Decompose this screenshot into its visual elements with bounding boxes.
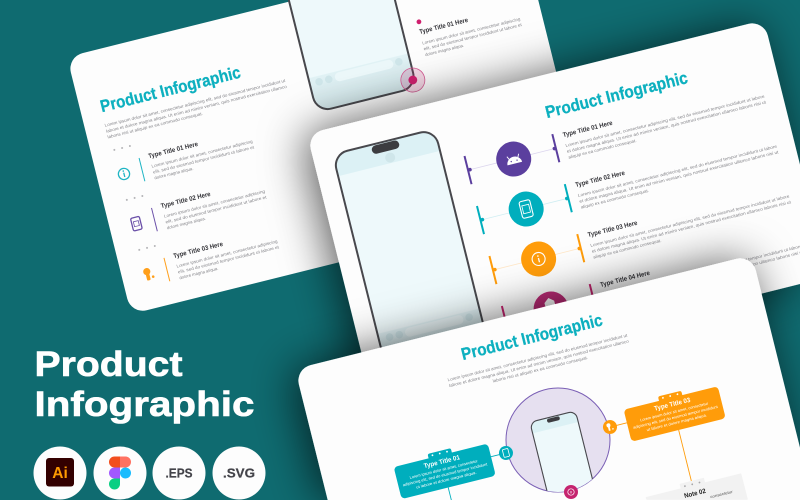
card: type title 03: Lorem ipsum dolor sit amet, consectetur xyxy=(639,400,709,422)
timeline row 4: pink: et dolore magna aliqua. Ut enim ad minim veniam, quis nostrud exercitation ullamco laboris nisi ut xyxy=(604,249,800,304)
timeline row 3: info: Type Title 03 Here xyxy=(587,220,639,239)
heading: slide two title: Product Infographic xyxy=(543,68,690,122)
callout: type title 01 with pink dot: elit, sed do eiusmod tempor incididunt ut labore et xyxy=(423,22,523,51)
heading: slide three title: Product Infographic xyxy=(459,310,605,364)
icon: svg badge xyxy=(212,446,266,500)
phone: slide one mockup xyxy=(263,0,417,112)
timeline row 3: info: Lorem ipsum dolor sit amet, consectetur adipiscing elit, sed do eiusmod tempor incididunt ut labore xyxy=(590,193,791,248)
timeline row 1: android: et dolore magna aliqua. Ut enim ad minim veniam, quis nostrud exercitation ullamco laboris nisi ut xyxy=(566,99,767,154)
timeline row 3: info xyxy=(488,179,795,288)
row: type title 01: Lorem ipsum dolor sit amet, consectetur adipiscing xyxy=(151,139,254,169)
text block: slide one intro: Lorem ipsum dolor sit amet, consectetur adipiscing elit, sed do eiusmod tempor incididunt ut xyxy=(104,78,287,128)
callout: type title 01 with pink dot: Type Title 01 Here xyxy=(419,17,469,36)
timeline row 1: android xyxy=(463,79,770,188)
callout: type title 01 with pink dot: Lorem ipsum dolor sit amet, consectetur adipiscing xyxy=(422,16,521,46)
main title: Product xyxy=(34,345,183,384)
timeline row 4: pink: Lorem ipsum dolor sit amet, consectetur adipiscing elit, sed do eiusmod tempor incididunt ut labore xyxy=(602,243,800,298)
main title xyxy=(34,345,254,424)
icon: eps badge: .EPS xyxy=(166,466,192,480)
row: type title 01: elit, sed do eiusmod tempor incididunt ut labore et xyxy=(152,144,255,175)
icon: svg badge: .SVG xyxy=(223,466,255,480)
timeline row 1: android: Type Title 01 Here xyxy=(562,120,614,139)
card: note 02: consectetur xyxy=(710,489,734,499)
text block: slide one intro: labore et dolore magna aliqua. Ut enim ad minim veniam, quis nostrud exercitation ullamco xyxy=(106,84,288,134)
card: note 02: Note 02 xyxy=(684,488,707,500)
timeline row 3: info: et dolore magna aliqua. Ut enim ad minim veniam, quis nostrud exercitation ullamco laboris nisi ut xyxy=(591,199,792,254)
row: type title 03: dolore magna aliqua. xyxy=(179,266,219,280)
connector: orange card to note xyxy=(679,430,691,481)
text block: slide three intro: laboris nisi ut aliquip ex ea commodo consequat. xyxy=(492,355,588,383)
connector: teal card to hub xyxy=(491,453,506,457)
hotspot: pink marker on phone corner xyxy=(398,65,427,95)
text block: slide three intro: labore et dolore magna aliqua. Ut enim ad minim veniam, quis nostrud exercitation ullamco xyxy=(449,338,630,388)
card: type title 01: adipiscing elit, sed do eiusmod tempor incididunt xyxy=(402,461,489,487)
timeline row 3: info: aliquip ex ea commodo consequat. xyxy=(593,238,662,260)
row: type title 03 xyxy=(138,216,282,288)
connector: teal card downward xyxy=(448,487,451,500)
row: type title 02: dolore magna aliqua. xyxy=(166,216,206,230)
row: type title 02 xyxy=(126,166,269,238)
card: type title 03 xyxy=(623,382,726,442)
phone: slide two mockup xyxy=(333,129,488,369)
heading: slide one title: Product Infographic xyxy=(98,63,243,116)
panel: middle slide with phone and timeline xyxy=(310,23,800,391)
row: type title 03: Type Title 03 Here xyxy=(173,241,224,260)
main title: Infographic xyxy=(34,385,254,424)
icon: eps badge xyxy=(152,446,206,500)
callout: type title 01 with pink dot: dolore magna aliqua. xyxy=(425,43,465,57)
connector: orange card to hub xyxy=(610,423,627,427)
card: note 02 xyxy=(646,474,747,500)
timeline row 1: android: aliquip ex ea commodo consequat. xyxy=(568,138,637,160)
icon: figma badge xyxy=(94,446,146,500)
timeline row 2: phone: Lorem ipsum dolor sit amet, consectetur adipiscing elit, sed do eiusmod tempor incididunt ut labore xyxy=(577,143,778,198)
timeline row 2: phone: Type Title 02 Here xyxy=(575,170,626,189)
icon: adobe illustrator badge: Ai xyxy=(52,465,68,482)
panel: front slide with hub diagram xyxy=(298,258,800,500)
timeline row 1: android: Lorem ipsum dolor sit amet, consectetur adipiscing elit, sed do eiusmod tempor incididunt ut labore xyxy=(565,93,766,148)
timeline row 4: pink: aliquip ex ea commodo consequat. xyxy=(605,288,674,310)
row: type title 02: Type Title 02 Here xyxy=(160,191,212,210)
timeline row 2: phone: aliquip ex ea commodo consequat. xyxy=(580,188,649,210)
card: type title 01: Type Title 01 xyxy=(423,454,461,470)
callout: type title 01 with pink dot xyxy=(416,0,525,57)
row: type title 01: dolore magna aliqua. xyxy=(154,166,194,180)
icon: adobe illustrator badge xyxy=(34,446,86,500)
text block: slide three intro: Lorem ipsum dolor sit amet, consectetur adipiscing elit, sed do eiusmod tempor incididunt ut xyxy=(447,333,629,382)
icon: pink info node xyxy=(564,485,578,499)
card: type title 01 xyxy=(393,439,496,499)
hub circle with phone xyxy=(506,388,610,498)
icon: teal phone node xyxy=(497,444,514,461)
row: type title 02: Lorem ipsum dolor sit amet, consectetur adipiscing xyxy=(163,189,266,219)
timeline row 4: pink xyxy=(500,229,800,338)
text block: slide one intro: laboris nisi ut aliquip ex ea commodo consequat. xyxy=(107,111,203,139)
card: type title 01: Lorem ipsum dolor sit amet, consectetur xyxy=(409,458,479,480)
row: type title 01 xyxy=(112,116,257,189)
icon: orange key node xyxy=(602,419,618,436)
timeline row 2: phone: et dolore magna aliqua. Ut enim ad minim veniam, quis nostrud exercitation ullamco laboris nisi ut xyxy=(579,149,780,204)
card: type title 03: Type Title 03 xyxy=(654,397,691,413)
row: type title 01: Type Title 01 Here xyxy=(148,141,199,160)
panel: back slide with three type rows xyxy=(41,0,588,314)
card: type title 03: ut labore et dolore magna aliqua. xyxy=(646,412,707,432)
row: type title 03: elit, sed do eiusmod tempor incididunt ut labore et xyxy=(177,244,280,274)
row: type title 03: Lorem ipsum dolor sit amet, consectetur adipiscing xyxy=(176,238,279,269)
timeline row 4: pink: Type Title 04 Here xyxy=(600,270,651,289)
card: type title 03: adipiscing elit, sed do eiusmod tempor incididunt xyxy=(633,404,719,430)
card: type title 01: ut labore et dolore magna aliqua. xyxy=(416,470,477,490)
timeline row 2: phone xyxy=(475,129,782,238)
row: type title 02: elit, sed do eiusmod tempor incididunt ut labore et xyxy=(165,194,268,225)
